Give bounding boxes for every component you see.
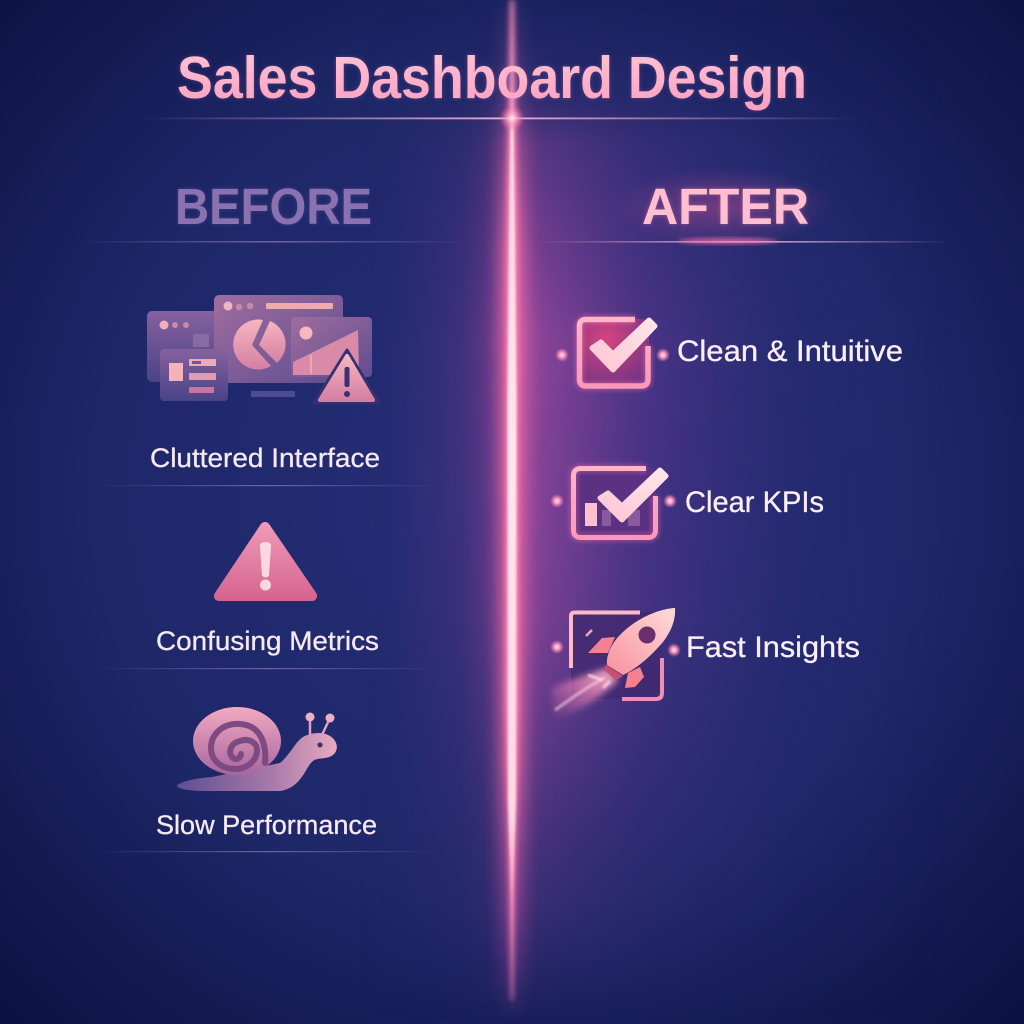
icon: KPI check box — [550, 467, 677, 538]
icon: snail — [177, 707, 337, 791]
panel: before — [95, 295, 440, 852]
heading: after: AFTER — [642, 178, 809, 235]
title: Sales Dashboard Design — [177, 45, 807, 111]
heading: before: BEFORE — [175, 178, 372, 235]
heading: after — [615, 167, 835, 247]
label: slow performance: Slow Performance — [156, 810, 377, 840]
heading: after: AFTER — [642, 178, 809, 235]
heading: before: BEFORE — [175, 178, 372, 235]
title: Sales Dashboard Design — [177, 45, 807, 111]
label: fast insights: Fast Insights — [686, 631, 860, 664]
panel: after — [550, 319, 903, 720]
label: confusing metrics: Confusing Metrics — [156, 626, 379, 656]
title underline — [140, 105, 860, 131]
after underline — [535, 238, 950, 244]
label: cluttered interface: Cluttered Interface — [150, 443, 380, 473]
icon: warning triangle — [219, 527, 312, 596]
icon: rocket — [550, 608, 681, 720]
icon: cluttered dashboard windows — [147, 295, 379, 403]
label: clear KPIs: Clear KPIs — [685, 486, 824, 519]
central glowing divider — [500, 0, 524, 1024]
before underline — [75, 241, 475, 242]
icon: clean check box — [555, 319, 670, 387]
label: clean and intuitive: Clean & Intuitive — [677, 335, 903, 368]
